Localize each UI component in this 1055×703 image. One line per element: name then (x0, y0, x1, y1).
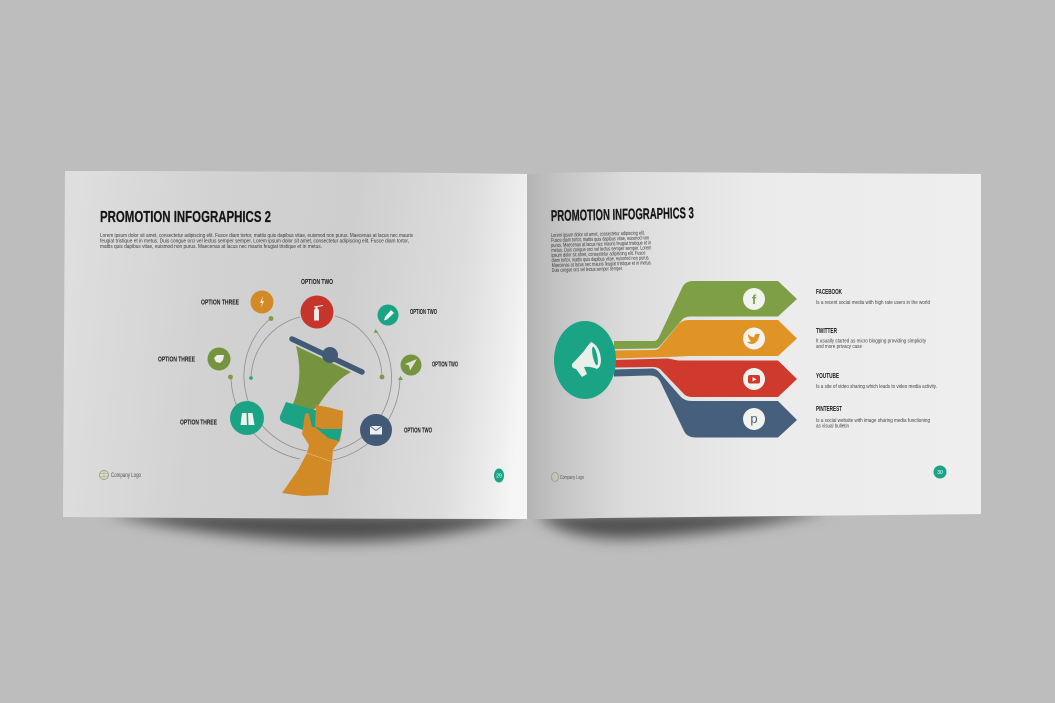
body text: Fusce diam tortor, mattis quis dapibus vitae, euismod non (551, 235, 649, 244)
option labels: OPTION THREE (158, 354, 195, 364)
body text (100, 233, 413, 250)
olive plane option (400, 354, 422, 376)
green arrow (614, 281, 797, 349)
teal megaphone circle (554, 321, 616, 399)
twitter text: and more privacy case (816, 344, 862, 350)
company logo: Company Logo (111, 473, 141, 479)
option labels: OPTION THREE (180, 418, 217, 426)
page number 29 (494, 468, 504, 482)
panel: right page (527, 172, 981, 519)
icon: bird (214, 355, 224, 363)
fist and arm (282, 405, 343, 496)
hand and megaphone (280, 339, 362, 496)
megaphone bar (292, 339, 362, 372)
page shadows (105, 510, 830, 542)
body text: purus. Maecenas at lacus nec mauris feugiat tristique et in (551, 240, 651, 249)
facebook text (816, 289, 930, 306)
body text: Duis congue orci vel lectus semper semper. (552, 266, 623, 274)
option labels: OPTION TWO (432, 360, 458, 368)
orange circle option (250, 290, 274, 314)
body text: feugiat tristique et in metus. Duis congue orci vel lectus semper semper. Lorem ipsum dolor sit amet, consectetur adipiscing elit. Fusce diam tortor, (100, 238, 409, 244)
olive circle option (208, 348, 230, 370)
page number 29: 29 (496, 474, 502, 480)
navy arrow (614, 368, 797, 438)
body text: mattis quis dapibus vitae, euismod non purus. Maecenas at lacus nec mauris feugiat tristique et in metus. (100, 244, 322, 250)
icon: youtube (743, 368, 765, 390)
pinterest text (816, 406, 930, 430)
youtube text (816, 373, 937, 390)
megaphone hump (322, 347, 338, 363)
body text: Lorem ipsum dolor sit amet, consectetur adipiscing elit. (551, 231, 645, 239)
youtube text: YOUTUBE (816, 373, 839, 380)
twitter text: It usually started as micro blogging providing simplicity (816, 338, 926, 344)
pinterest text: PINTEREST (816, 406, 842, 413)
company logo (100, 470, 141, 480)
megaphone bell (293, 346, 351, 411)
icon: binoculars (240, 413, 254, 425)
facebook text: FACEBOOK (816, 289, 842, 296)
teal cuff (280, 402, 318, 430)
facebook text: Is a recent social media with high rate users in the world (816, 300, 930, 306)
twitter text (816, 328, 926, 350)
icon: megaphone opening (591, 346, 599, 366)
icon: bolt (260, 296, 264, 308)
company logo (552, 472, 584, 482)
teal binocular option (230, 401, 264, 435)
title: promotion infographics 2: PROMOTION INFOGRAPHICS 2 (100, 209, 271, 226)
option labels: OPTION TWO (301, 277, 333, 286)
icon: mail (370, 426, 382, 434)
orbit markers (228, 316, 403, 380)
body text: diam tortor, mattis quis dapibus vitae, euismod non purus. (552, 255, 650, 264)
page number 30 (934, 466, 946, 478)
body text (551, 230, 652, 274)
option labels (158, 277, 458, 434)
icon: megaphone (572, 342, 601, 377)
pinterest text: as visual bulletin (816, 424, 849, 430)
option labels: OPTION THREE (201, 298, 239, 306)
company logo: Company Logo (560, 475, 584, 481)
teal band (314, 426, 342, 441)
youtube text: Is a site of video sharing which leads to video media activity. (816, 384, 937, 390)
body text: Maecenas at lacus nec mauris feugiat tristique et in metus. (552, 260, 652, 269)
body text: Lorem ipsum dolor sit amet, consectetur adipiscing elit. Fusce diam tortor, mattis quis dapibus vitae, euismod non purus. Maecenas at lacus nec mauris (100, 233, 413, 239)
panel: left page (63, 171, 527, 519)
pinterest text: Is a social website with image sharing media functioning (816, 418, 930, 424)
orbit rings (231, 316, 400, 460)
title: promotion infographics 3: PROMOTION INFOGRAPHICS 3 (551, 205, 694, 225)
option labels: OPTION TWO (410, 307, 437, 316)
red arrow (614, 358, 797, 397)
body text: metus. Duis congue orci vel lectus semper semper. Lorem (551, 245, 652, 254)
icon: extinguisher (314, 305, 323, 320)
body text: ipsum dolor sit amet, consectetur adipiscing elit. Fusce (551, 251, 646, 259)
orange arrow (614, 320, 797, 358)
icon: pinterest: p (750, 411, 758, 426)
icon: twitter (743, 328, 765, 350)
twitter text: TWITTER (816, 328, 837, 335)
icon: facebook: f (752, 292, 757, 307)
icon: pipette (384, 310, 394, 320)
icon: paper plane (405, 359, 417, 370)
icon: facebook (743, 288, 765, 310)
icon: pinterest (743, 408, 765, 430)
page number 30: 30 (937, 470, 943, 476)
navy mail option (360, 414, 392, 446)
option labels: OPTION TWO (404, 426, 432, 434)
teal pen option (378, 304, 398, 326)
red circle option (300, 296, 334, 328)
wrist line (307, 453, 333, 462)
